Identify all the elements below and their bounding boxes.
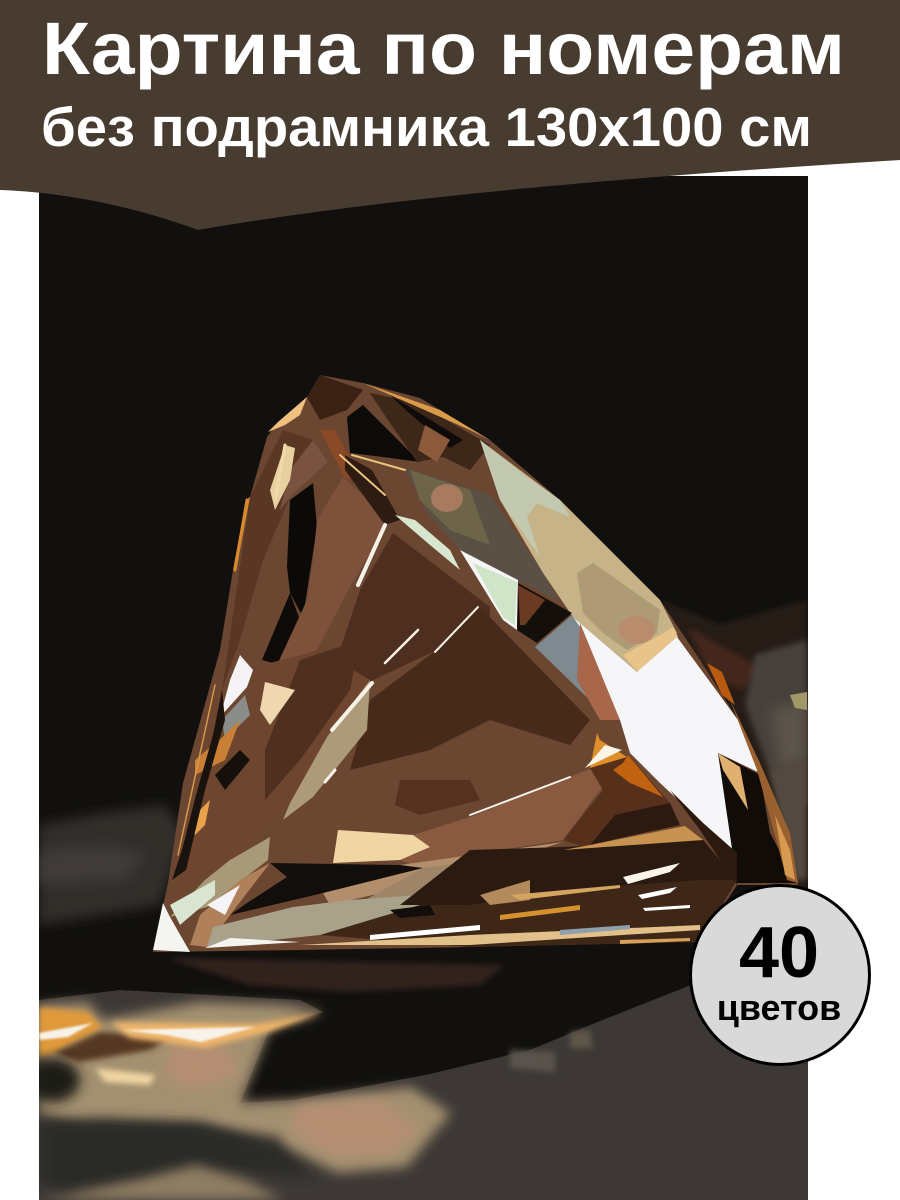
tan strip beside the streak — [283, 680, 370, 820]
mint facet — [460, 550, 518, 630]
painting: diamond on a dark background — [24, 176, 808, 1200]
left pavilion facets — [222, 430, 313, 689]
subtitle: без подрамника 130х100 см — [41, 96, 812, 158]
bright lower streaks — [300, 925, 700, 945]
badge: 40 colours — [690, 886, 870, 1064]
lower fan facets — [170, 837, 270, 917]
grey-blue facet — [535, 615, 587, 698]
header banner — [0, 0, 900, 230]
crown rim and interior — [307, 375, 363, 420]
white tip — [153, 903, 190, 952]
dark inner facet — [517, 583, 572, 643]
cream patch — [333, 830, 430, 863]
title: Картина по номерам — [42, 7, 845, 90]
white and gold facet streaks — [178, 445, 570, 855]
lower right orange facet — [563, 755, 670, 848]
olive facet — [405, 468, 560, 602]
black wedge — [230, 863, 423, 915]
badge: 40 colours: цветов — [717, 987, 841, 1028]
ground and light patches — [24, 600, 808, 1200]
diamond — [153, 375, 798, 952]
white facet — [573, 617, 760, 853]
badge: 40 colours: 40 — [739, 913, 819, 993]
pale table facet — [480, 440, 677, 672]
centre dark facet — [267, 607, 597, 837]
diamond body — [153, 375, 798, 952]
right dark facet — [718, 753, 797, 883]
